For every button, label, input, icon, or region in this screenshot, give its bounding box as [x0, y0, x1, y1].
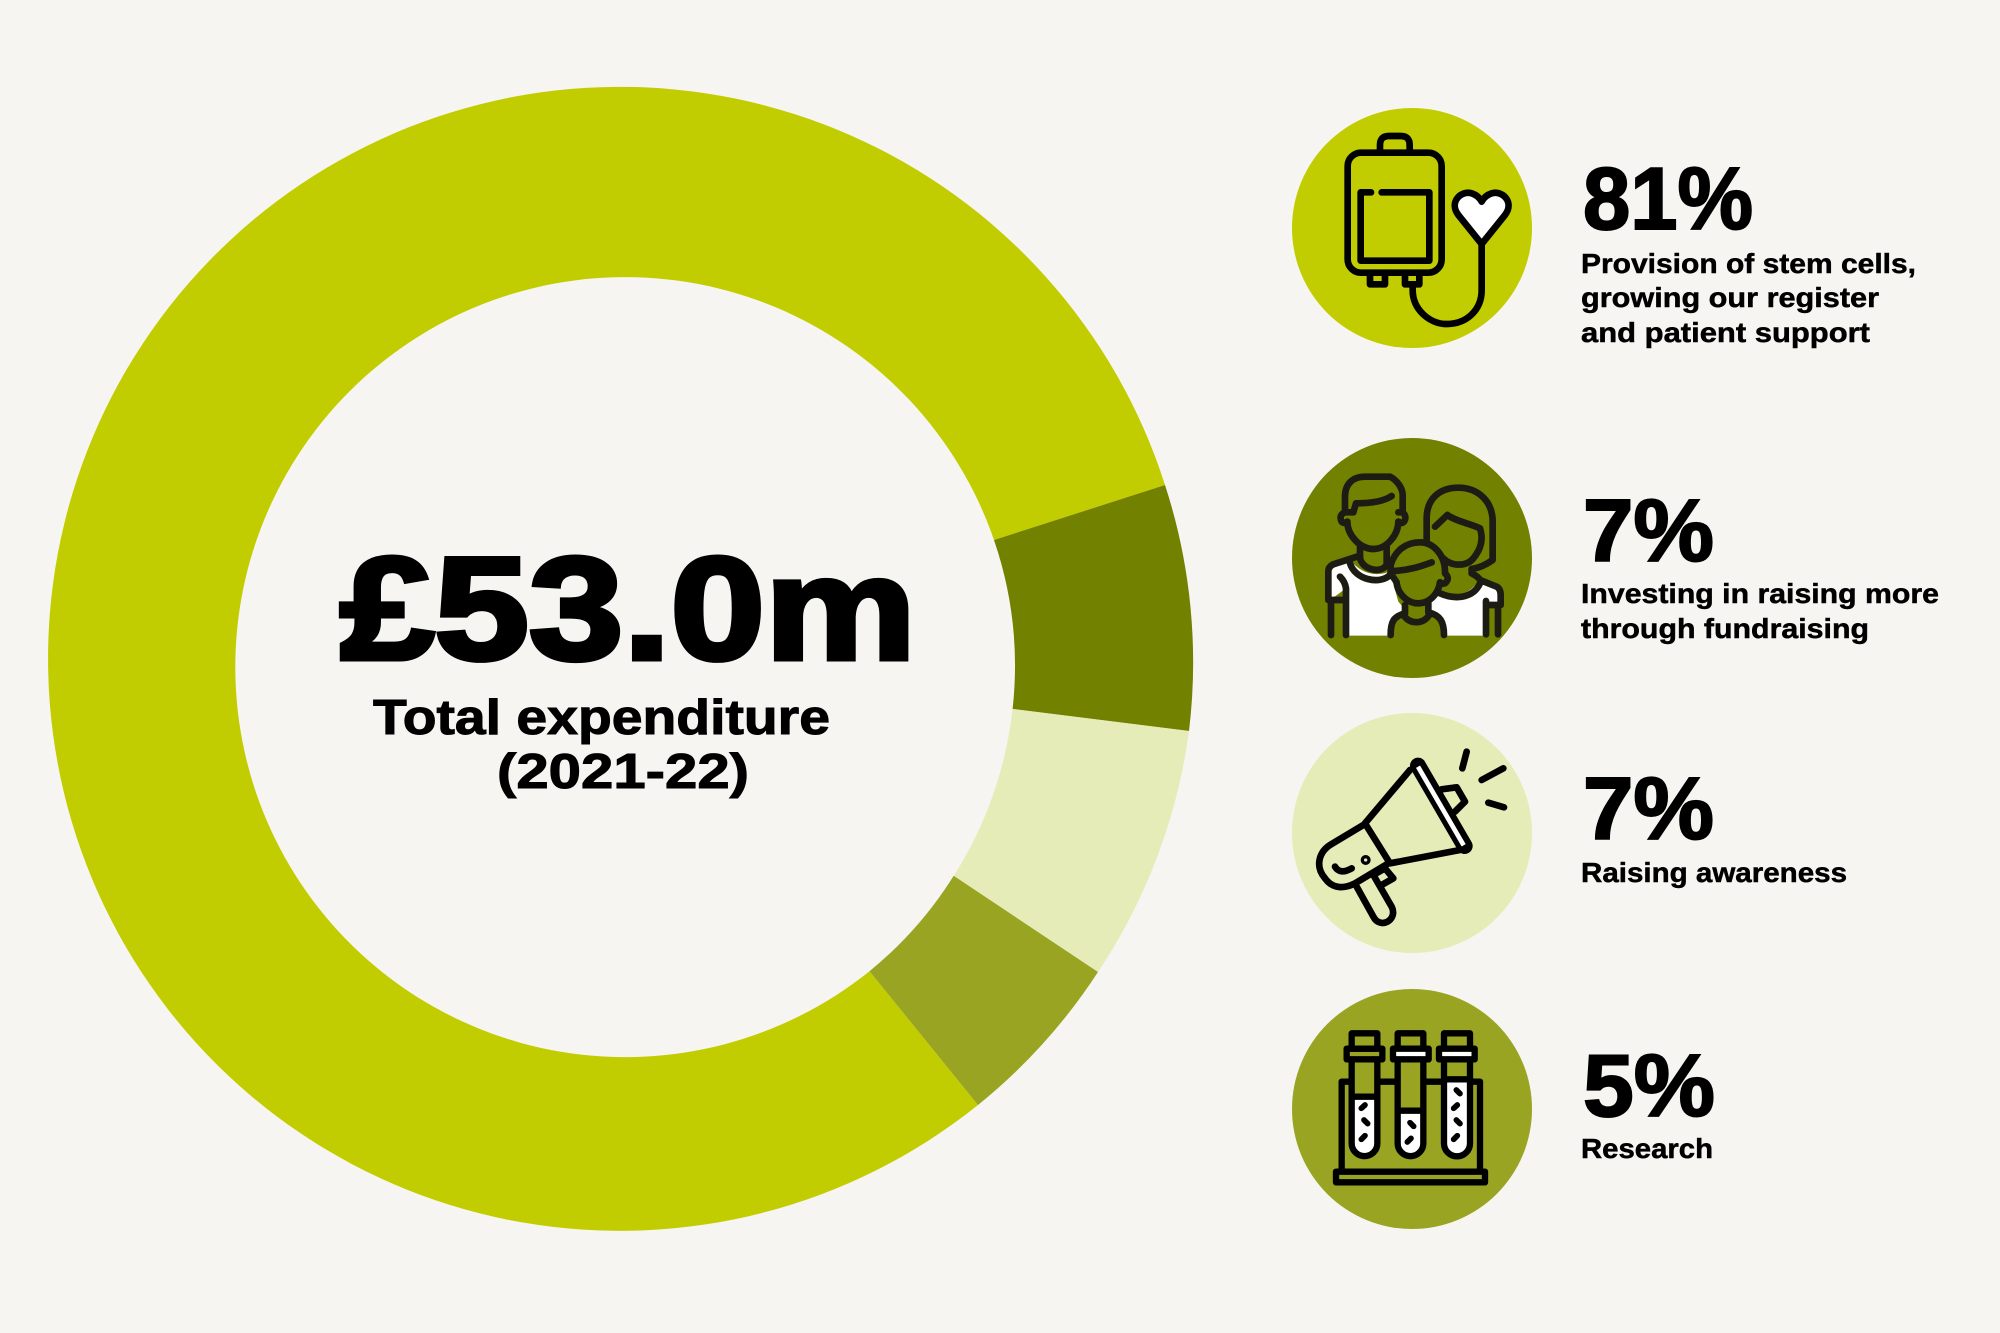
icon: blood bag with heart: [1292, 108, 1532, 348]
icon: megaphone: [1292, 713, 1532, 953]
percentage: 5%: [1583, 1036, 1715, 1135]
description: Provision of stem cells,: [1581, 248, 1916, 279]
percentage: 7%: [1583, 481, 1714, 580]
icon: test tubes: [1292, 989, 1532, 1229]
description: Raising awareness: [1581, 857, 1847, 888]
description: through fundraising: [1581, 613, 1869, 644]
description: Investing in raising more: [1581, 578, 1939, 609]
item: 5% research: [1292, 989, 1715, 1229]
segment: 7% raising awareness: [954, 709, 1189, 972]
total label: (2021-22): [497, 745, 749, 799]
description: Research: [1581, 1133, 1713, 1164]
item: 7% awareness: [1292, 713, 1847, 953]
segment: 81% provision of stem cells: [48, 87, 1165, 1231]
description: [1581, 578, 1939, 644]
description: growing our register: [1581, 282, 1879, 313]
percentage: 7%: [1583, 759, 1714, 858]
item: 7% fundraising: [1292, 438, 1939, 678]
segment: 7% fundraising: [994, 485, 1193, 731]
item: 81%: [1292, 108, 1916, 348]
percentage: 81%: [1583, 149, 1753, 248]
total amount: £53.0m: [340, 527, 916, 690]
description: [1581, 248, 1916, 348]
icon: family: [1292, 438, 1532, 678]
segment: 5% research: [870, 876, 1098, 1105]
description: and patient support: [1581, 317, 1870, 348]
total label: [373, 691, 830, 799]
total label: Total expenditure: [373, 691, 830, 745]
donut chart: [48, 87, 1193, 1231]
